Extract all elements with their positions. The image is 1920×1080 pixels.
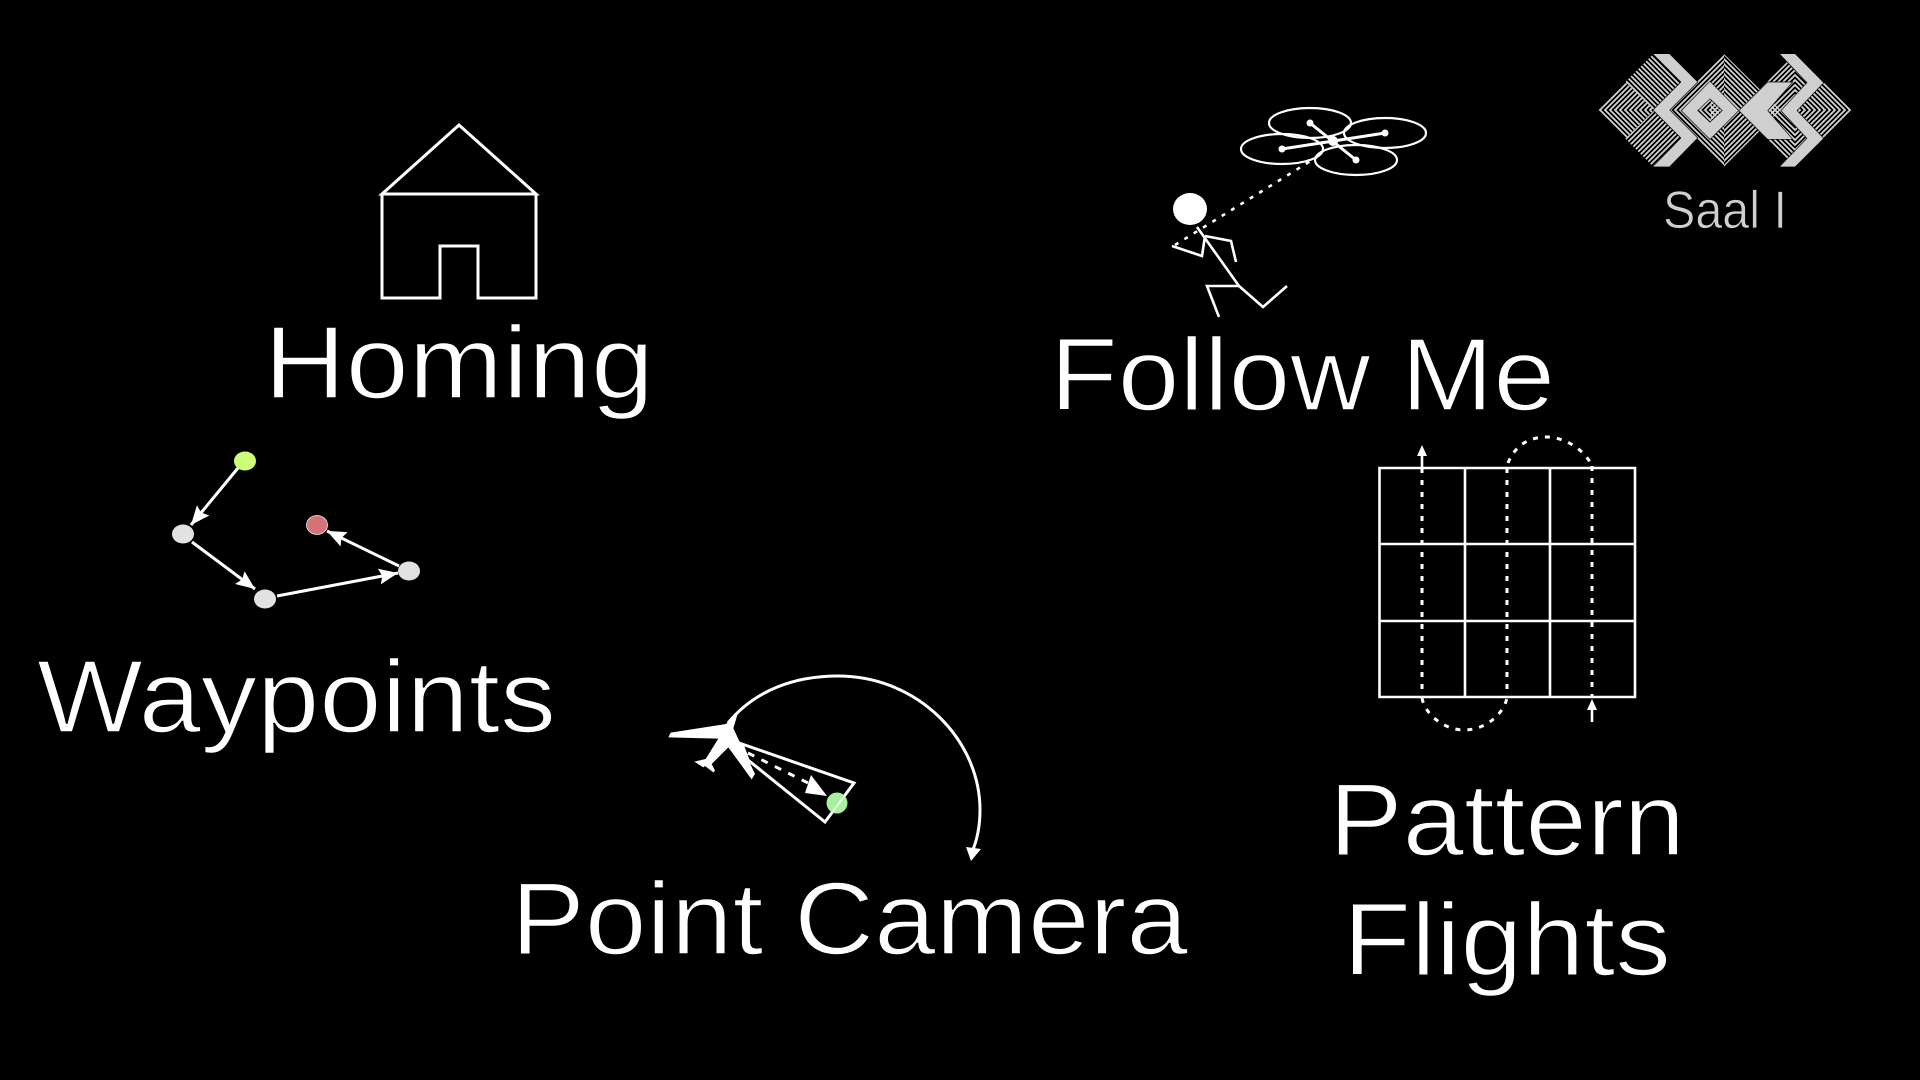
- plane: [668, 712, 755, 779]
- icon: plane with camera beam: [668, 676, 981, 861]
- dotted tracking line: [1175, 157, 1317, 245]
- icon: waypoint route: [172, 452, 420, 608]
- icon: house: [382, 125, 536, 298]
- panel: point camera: [511, 676, 1189, 976]
- logo mark: [1597, 54, 1852, 167]
- heading: follow me: Follow Me: [1050, 317, 1555, 432]
- target dot: [826, 792, 848, 814]
- heading: pattern flights: [1329, 762, 1685, 997]
- panel: waypoints: [37, 452, 556, 754]
- logo: Saal I: [1597, 54, 1852, 240]
- flight arc: [728, 676, 980, 852]
- logo label: Saal I: [1663, 181, 1787, 240]
- panel: follow me: [1050, 108, 1555, 432]
- camera beam: [742, 744, 854, 822]
- icon: drone: [1241, 108, 1426, 175]
- heading: pattern flights: Flights: [1343, 882, 1671, 997]
- icon: survey grid: [1380, 437, 1635, 730]
- icon: running person: [1172, 193, 1287, 317]
- heading: point camera: Point Camera: [511, 861, 1189, 976]
- camera direction arrow: [748, 753, 810, 784]
- panel: homing: [264, 125, 654, 420]
- heading: pattern flights: Pattern: [1329, 762, 1685, 877]
- panel: pattern flights: [1329, 437, 1685, 997]
- heading: homing: Homing: [264, 305, 654, 420]
- heading: waypoints: Waypoints: [37, 639, 556, 754]
